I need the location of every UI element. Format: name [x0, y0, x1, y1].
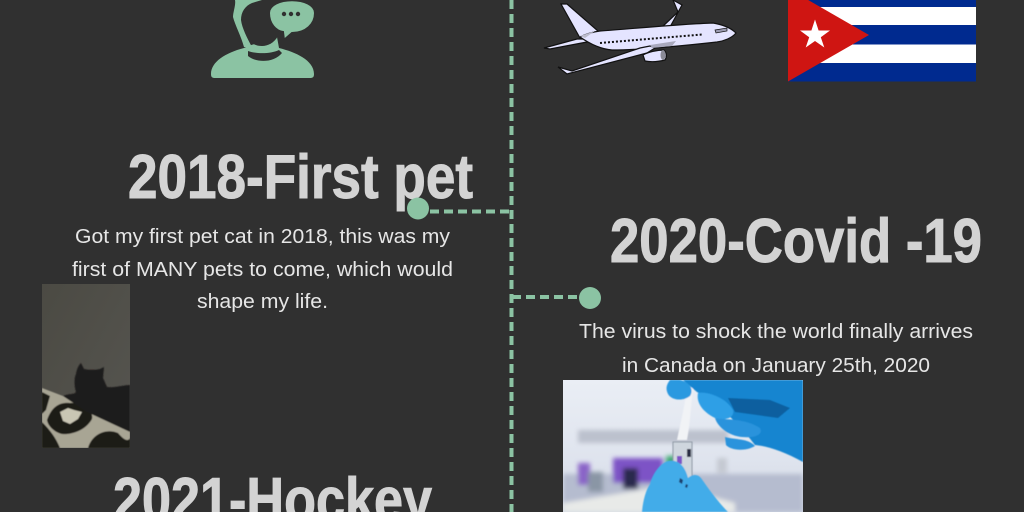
text block: 2018: shape my life.: [197, 291, 328, 313]
icon: Cuban flag: [788, 0, 976, 81]
marker: 2018: [407, 198, 429, 220]
text block: 2018: [72, 226, 453, 313]
timeline connector: [430, 0, 578, 512]
text block: 2018: Got my first pet cat in 2018, this was my: [75, 226, 450, 248]
heading: 2018: 2018-First pet: [128, 143, 473, 212]
photo: cat: [42, 284, 130, 448]
text block: 2020: The virus to shock the world finally arrives: [579, 321, 973, 343]
icon: airplane: [544, 0, 736, 74]
marker: 2020: [579, 287, 601, 309]
text block: 2020: [579, 321, 973, 377]
icon: person with speech bubble: [211, 0, 315, 78]
text block: 2020: in Canada on January 25th, 2020: [622, 355, 930, 377]
photo: lab swab test: [563, 380, 803, 512]
text block: 2018: first of MANY pets to come, which would: [72, 259, 453, 281]
